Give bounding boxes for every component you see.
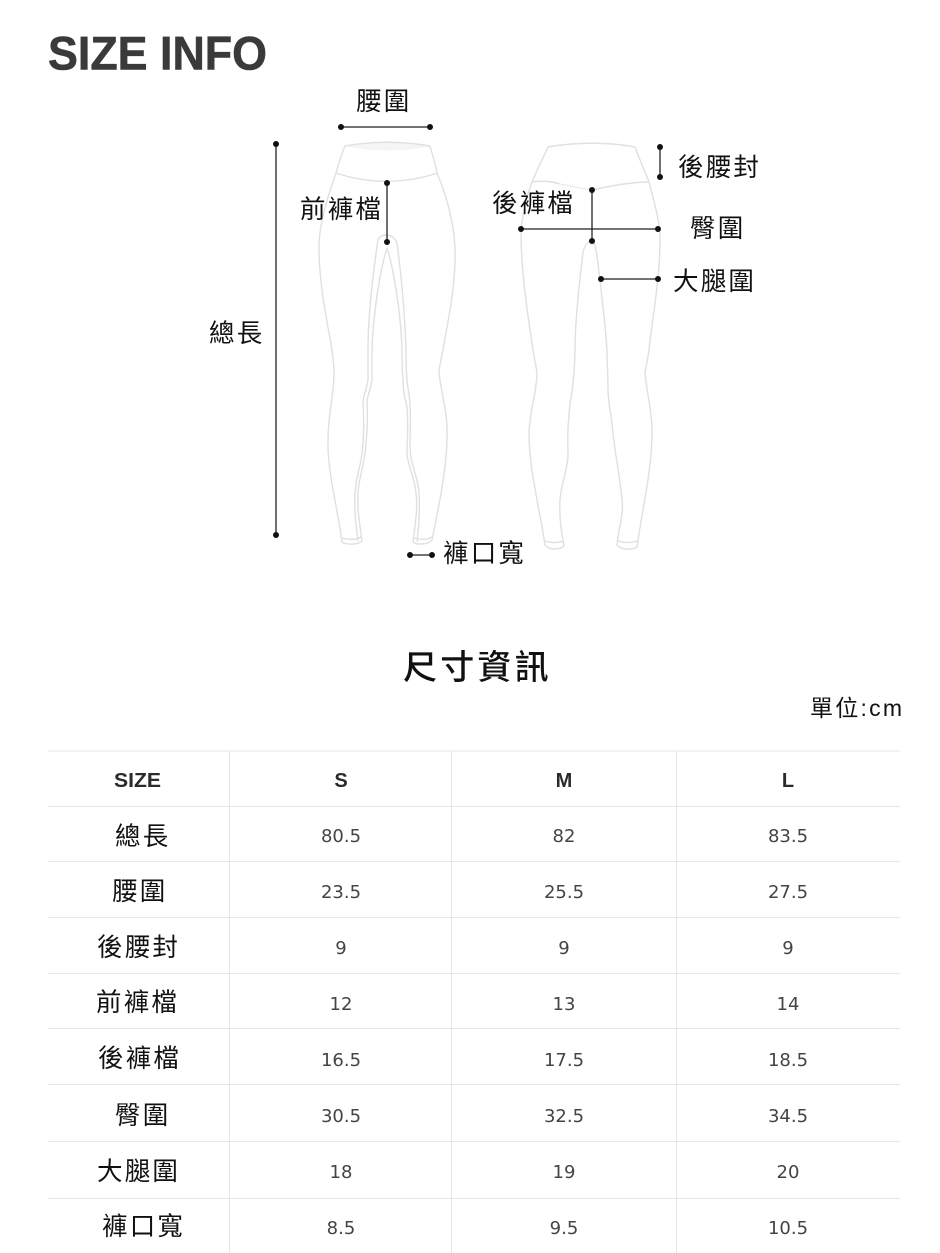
diagram: front view of leggings	[319, 142, 455, 544]
row: cuff: 8.5	[327, 1218, 355, 1239]
row: back rise	[98, 1045, 808, 1073]
heading: size information: 尺寸資訊	[403, 649, 552, 687]
size table	[48, 751, 900, 1253]
row: back waistband	[97, 934, 794, 962]
measure: waist line	[338, 124, 433, 130]
row: cuff: 9.5	[550, 1218, 578, 1239]
measure: front rise line	[384, 180, 390, 245]
measure: back waistband line	[657, 144, 663, 180]
row: waist: 腰圍	[112, 878, 167, 906]
table header row: L	[782, 770, 794, 792]
row: hip: 30.5	[321, 1106, 361, 1127]
measure: cuff line	[407, 552, 435, 558]
row: thigh: 大腿圍	[97, 1158, 180, 1186]
row: front rise: 前褲檔	[96, 989, 179, 1017]
table header row	[114, 770, 794, 792]
row: front rise: 12	[330, 994, 352, 1015]
row: back waistband: 9	[335, 938, 347, 959]
table header row: M	[556, 770, 572, 792]
measure: total length line	[273, 141, 279, 538]
measure: thigh line	[598, 276, 661, 282]
row: front rise: 13	[553, 994, 575, 1015]
row: hip: 34.5	[768, 1106, 808, 1127]
row: back waistband: 9	[782, 938, 794, 959]
row: waist: 23.5	[321, 882, 361, 903]
row: waist	[112, 878, 808, 906]
row: hip: 32.5	[544, 1106, 584, 1127]
diagram: back view of leggings	[521, 143, 660, 549]
label: waist: 腰圍	[356, 88, 411, 116]
row: hip	[115, 1102, 808, 1130]
label: cuff: 褲口寬	[443, 540, 526, 568]
row: thigh: 18	[330, 1162, 352, 1183]
label: hip: 臀圍	[690, 215, 745, 243]
row: waist: 25.5	[544, 882, 584, 903]
row: total length	[115, 823, 808, 851]
label: front rise: 前褲檔	[300, 196, 383, 224]
row: front rise	[96, 989, 799, 1017]
row: back waistband: 後腰封	[97, 934, 180, 962]
title: SIZE INFO: SIZE INFO	[48, 26, 267, 80]
label: back waistband: 後腰封	[678, 154, 761, 182]
row: total length: 總長	[115, 823, 170, 851]
row: total length: 83.5	[768, 826, 808, 847]
table header row: S	[334, 770, 348, 792]
row: back waistband: 9	[558, 938, 570, 959]
row: back rise: 18.5	[768, 1050, 808, 1071]
label: thigh: 大腿圍	[673, 268, 756, 296]
row: total length: 82	[553, 826, 575, 847]
row: hip: 臀圍	[115, 1102, 170, 1130]
label: total length: 總長	[209, 320, 264, 348]
row: cuff	[102, 1213, 808, 1241]
row: thigh: 20	[777, 1162, 799, 1183]
row: back rise: 後褲檔	[98, 1045, 181, 1073]
row: back rise: 17.5	[544, 1050, 584, 1071]
unit note: 單位:cm	[810, 695, 902, 721]
row: cuff: 10.5	[768, 1218, 808, 1239]
table header row: SIZE	[114, 770, 161, 792]
row: back rise: 16.5	[321, 1050, 361, 1071]
label: back rise: 後褲檔	[492, 190, 575, 218]
measure: back rise line	[589, 187, 595, 244]
row: thigh: 19	[553, 1162, 575, 1183]
row: thigh	[97, 1158, 799, 1186]
row: waist: 27.5	[768, 882, 808, 903]
row: total length: 80.5	[321, 826, 361, 847]
row: front rise: 14	[777, 994, 799, 1015]
row: cuff: 褲口寬	[102, 1213, 185, 1241]
measure: hip line	[518, 226, 661, 232]
